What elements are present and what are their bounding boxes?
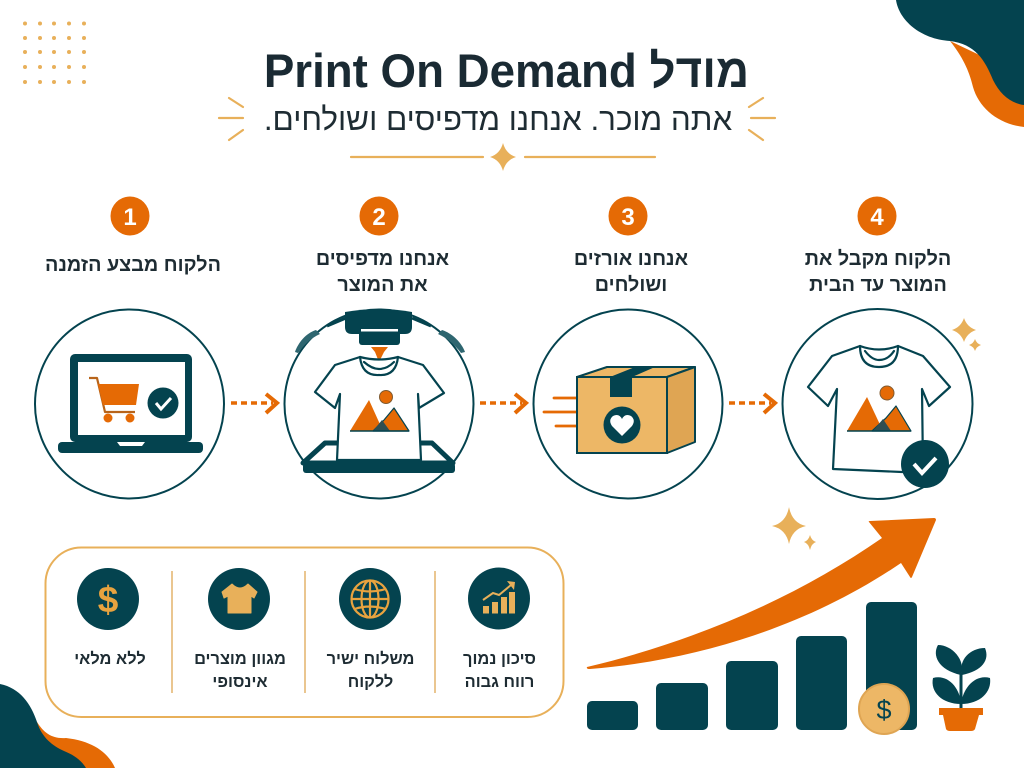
growth arrow xyxy=(587,518,936,669)
benefits panel xyxy=(46,548,564,717)
title divider with star xyxy=(351,143,655,171)
coin xyxy=(859,684,909,734)
benefit: no inventory: $ xyxy=(98,579,119,620)
benefit: endless products: מגוון מוצרים xyxy=(194,650,286,668)
step 1 number: 1 xyxy=(123,204,137,231)
benefit: direct shipping: משלוח ישיר xyxy=(327,650,414,668)
step 3 xyxy=(534,196,722,498)
step 1 label: הלקוח מבצע הזמנה xyxy=(45,254,221,276)
step 1 number xyxy=(110,196,150,236)
step 2 number: 2 xyxy=(372,204,386,231)
step 4 label xyxy=(805,248,951,296)
step 1 xyxy=(35,196,224,498)
step 2 number xyxy=(360,196,398,236)
step 4 number: 4 xyxy=(870,204,884,231)
step 3 number: 3 xyxy=(621,204,635,231)
step 3 label: אנחנו אורזים xyxy=(574,248,689,270)
step 1 circle with laptop and cart xyxy=(35,310,224,498)
arrow 1 to 2 xyxy=(231,394,277,413)
step 2 xyxy=(284,196,474,498)
step 2 label: אנחנו מדפיסים xyxy=(316,248,450,270)
growth bar chart xyxy=(587,602,917,730)
step 2 circle with printer and shirt xyxy=(284,309,474,498)
subtitle: אתה מוכר. אנחנו מדפיסים ושולחים. xyxy=(264,102,732,137)
subtitle rays: left xyxy=(219,98,243,140)
benefit: low risk high profit xyxy=(463,568,536,691)
step 4 circle with shirt xyxy=(782,309,972,499)
benefit: endless products: אינסופי xyxy=(212,673,268,691)
coin: $ xyxy=(876,695,892,725)
step 3 label xyxy=(574,248,689,296)
step 3 circle with parcel xyxy=(534,310,722,498)
decorative corner: bottom left xyxy=(0,684,115,768)
benefit: direct shipping xyxy=(327,568,414,691)
step 4 label: המוצר עד הבית xyxy=(809,274,947,296)
step 2 label: את המוצר xyxy=(337,274,428,296)
title: מודל Print On Demand xyxy=(264,44,749,97)
growth sparkles xyxy=(772,507,816,550)
decorative corner: top right xyxy=(896,0,1024,127)
benefit: no inventory xyxy=(74,568,146,668)
benefit: low risk high profit: סיכון נמוך xyxy=(463,650,536,668)
step 4 label: הלקוח מקבל את xyxy=(805,248,951,270)
sparkles xyxy=(952,318,981,351)
step 4 number xyxy=(858,196,896,236)
step 3 label: ושולחים xyxy=(595,274,667,296)
arrow 3 to 4 xyxy=(729,394,775,413)
arrow 2 to 3 xyxy=(480,394,526,413)
step 3 number xyxy=(608,196,648,236)
dot grid decoration xyxy=(23,22,86,84)
benefit: direct shipping: ללקוח xyxy=(348,673,393,691)
plant xyxy=(933,645,990,731)
step 4 xyxy=(782,196,981,499)
step 2 label xyxy=(316,248,450,296)
benefit: low risk high profit: רווח גבוה xyxy=(465,673,534,691)
benefit: no inventory: ללא מלאי xyxy=(74,650,146,668)
benefit: endless products xyxy=(194,568,286,691)
subtitle rays: right xyxy=(749,98,775,140)
